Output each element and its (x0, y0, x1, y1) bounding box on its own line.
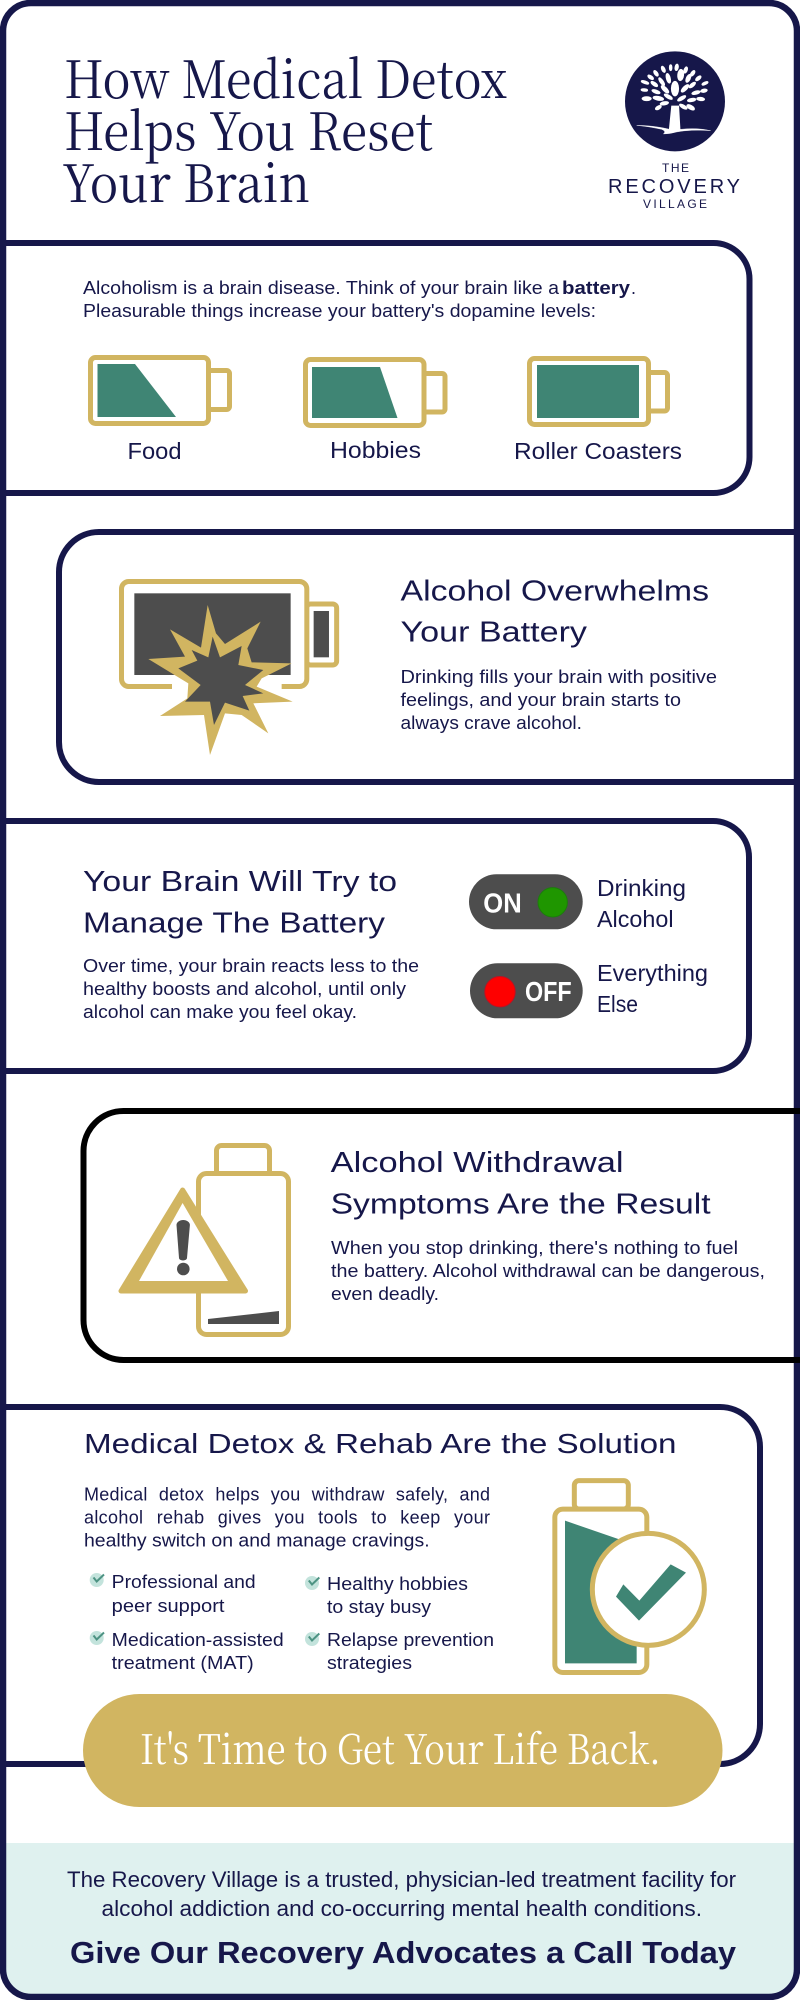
list item: professional and peer support: peer support (112, 1596, 224, 1616)
panel: manage the battery (0, 821, 749, 1071)
label: everything else: Else (597, 991, 638, 1017)
toggle: off (470, 963, 583, 1018)
footer text: alcohol addiction and co-occurring mental health conditions. (102, 1896, 702, 1921)
intro text: Alcoholism is a brain disease. Think of your brain like a (83, 278, 560, 298)
icon: low battery with warning triangle (121, 1146, 288, 1334)
heading: alcohol overwhelms: Your Battery (400, 616, 588, 648)
list item: relapse prevention (305, 1630, 494, 1673)
heading: manage the battery: Manage The Battery (83, 908, 386, 940)
title: How Medical Detox (64, 38, 507, 113)
label: hobbies: Hobbies (330, 437, 421, 463)
label: everything else: Everything (597, 960, 708, 986)
label: drinking alcohol: Alcohol (597, 906, 674, 932)
intro text: battery (562, 278, 630, 298)
call to action pill: It's Time to Get Your Life Back. (140, 1717, 661, 1776)
body text: always crave alcohol. (400, 713, 582, 733)
list item: healthy hobbies: to stay busy (327, 1597, 431, 1617)
toggle: on (469, 874, 583, 929)
body text: healthy boosts and alcohol, until only (83, 979, 406, 999)
body text: even deadly. (331, 1284, 439, 1304)
heading: manage the battery (83, 866, 397, 940)
title (62, 38, 507, 217)
withdrawal panel right edge over frame (790, 1111, 800, 1360)
body text (83, 956, 419, 1022)
body text (400, 667, 717, 733)
panel: withdrawal symptoms (84, 1111, 800, 1360)
body text: alcohol rehab gives you tools to keep your (84, 1508, 490, 1528)
intro text: . (631, 278, 636, 298)
logo wordmark: VILLAGE (643, 197, 707, 211)
list item: relapse prevention: strategies (327, 1653, 412, 1673)
list item: medication-assisted treatment (90, 1630, 284, 1673)
label: drinking alcohol: Drinking (597, 875, 686, 901)
intro text: Pleasurable things increase your battery's dopamine levels: (83, 301, 596, 321)
body text: alcohol can make you feel okay. (83, 1002, 357, 1022)
body text: healthy switch on and manage cravings. (84, 1531, 430, 1551)
heading: alcohol overwhelms: Alcohol Overwhelms (400, 576, 709, 608)
body text: Medical detox helps you withdraw safely, and (84, 1485, 490, 1505)
heading: withdrawal symptoms (331, 1147, 711, 1221)
panel: medical detox solution (0, 1407, 760, 1764)
footer text (67, 1867, 737, 1970)
heading: solution: Medical Detox & Rehab Are the Solution (84, 1428, 676, 1459)
footer background (0, 1843, 800, 2000)
body text: When you stop drinking, there's nothing to fuel (331, 1238, 738, 1258)
label: roller coasters: Roller Coasters (514, 438, 682, 464)
icon: tree in circle (625, 51, 725, 151)
heading: manage the battery: Your Brain Will Try to (83, 866, 397, 898)
logo: The Recovery Village (608, 51, 740, 211)
call to action pill (83, 1694, 722, 1807)
intro text (83, 278, 636, 321)
logo wordmark: RECOVERY (608, 176, 740, 198)
toggle: on: ON (483, 887, 522, 918)
logo wordmark (608, 161, 740, 211)
list item: healthy hobbies (305, 1574, 468, 1617)
icon: battery with check mark (555, 1481, 704, 1672)
icon: food battery (90, 358, 230, 424)
heading: withdrawal symptoms: Alcohol Withdrawal (331, 1147, 624, 1179)
panel: alcohol overwhelms (59, 532, 794, 782)
footer text: The Recovery Village is a trusted, physician-led treatment facility for (67, 1867, 736, 1892)
label: drinking alcohol (597, 875, 686, 932)
list item: professional and peer support: Professional and (112, 1572, 256, 1592)
body text: feelings, and your brain starts to (400, 690, 681, 710)
body text: the battery. Alcohol withdrawal can be dangerous, (331, 1261, 765, 1281)
heading: alcohol overwhelms (400, 576, 709, 648)
list item: medication-assisted treatment: treatment (MAT) (112, 1653, 254, 1673)
list item: medication-assisted treatment: Medication-assisted (112, 1630, 284, 1650)
body text (84, 1485, 490, 1551)
toggle: off: OFF (525, 976, 572, 1007)
call today line: Give Our Recovery Advocates a Call Today (70, 1935, 737, 1970)
heading: withdrawal symptoms: Symptoms Are the Result (331, 1189, 711, 1221)
body text: Drinking fills your brain with positive (400, 667, 717, 687)
title: Helps You Reset (64, 90, 433, 165)
list item: healthy hobbies: Healthy hobbies (327, 1574, 468, 1594)
label: everything else (597, 960, 708, 1017)
list item: relapse prevention: Relapse prevention (327, 1630, 494, 1650)
panel: battery intro (0, 243, 750, 493)
icon: roller coasters battery (530, 358, 668, 424)
body text: Over time, your brain reacts less to the (83, 956, 419, 976)
label: food: Food (128, 438, 182, 464)
logo wordmark: THE (662, 161, 689, 175)
body text (331, 1238, 765, 1304)
icon: hobbies battery (306, 360, 445, 426)
list item: professional and peer support (90, 1572, 256, 1616)
title: Your Brain (62, 142, 310, 217)
icon: overloaded battery with burst (121, 581, 337, 755)
